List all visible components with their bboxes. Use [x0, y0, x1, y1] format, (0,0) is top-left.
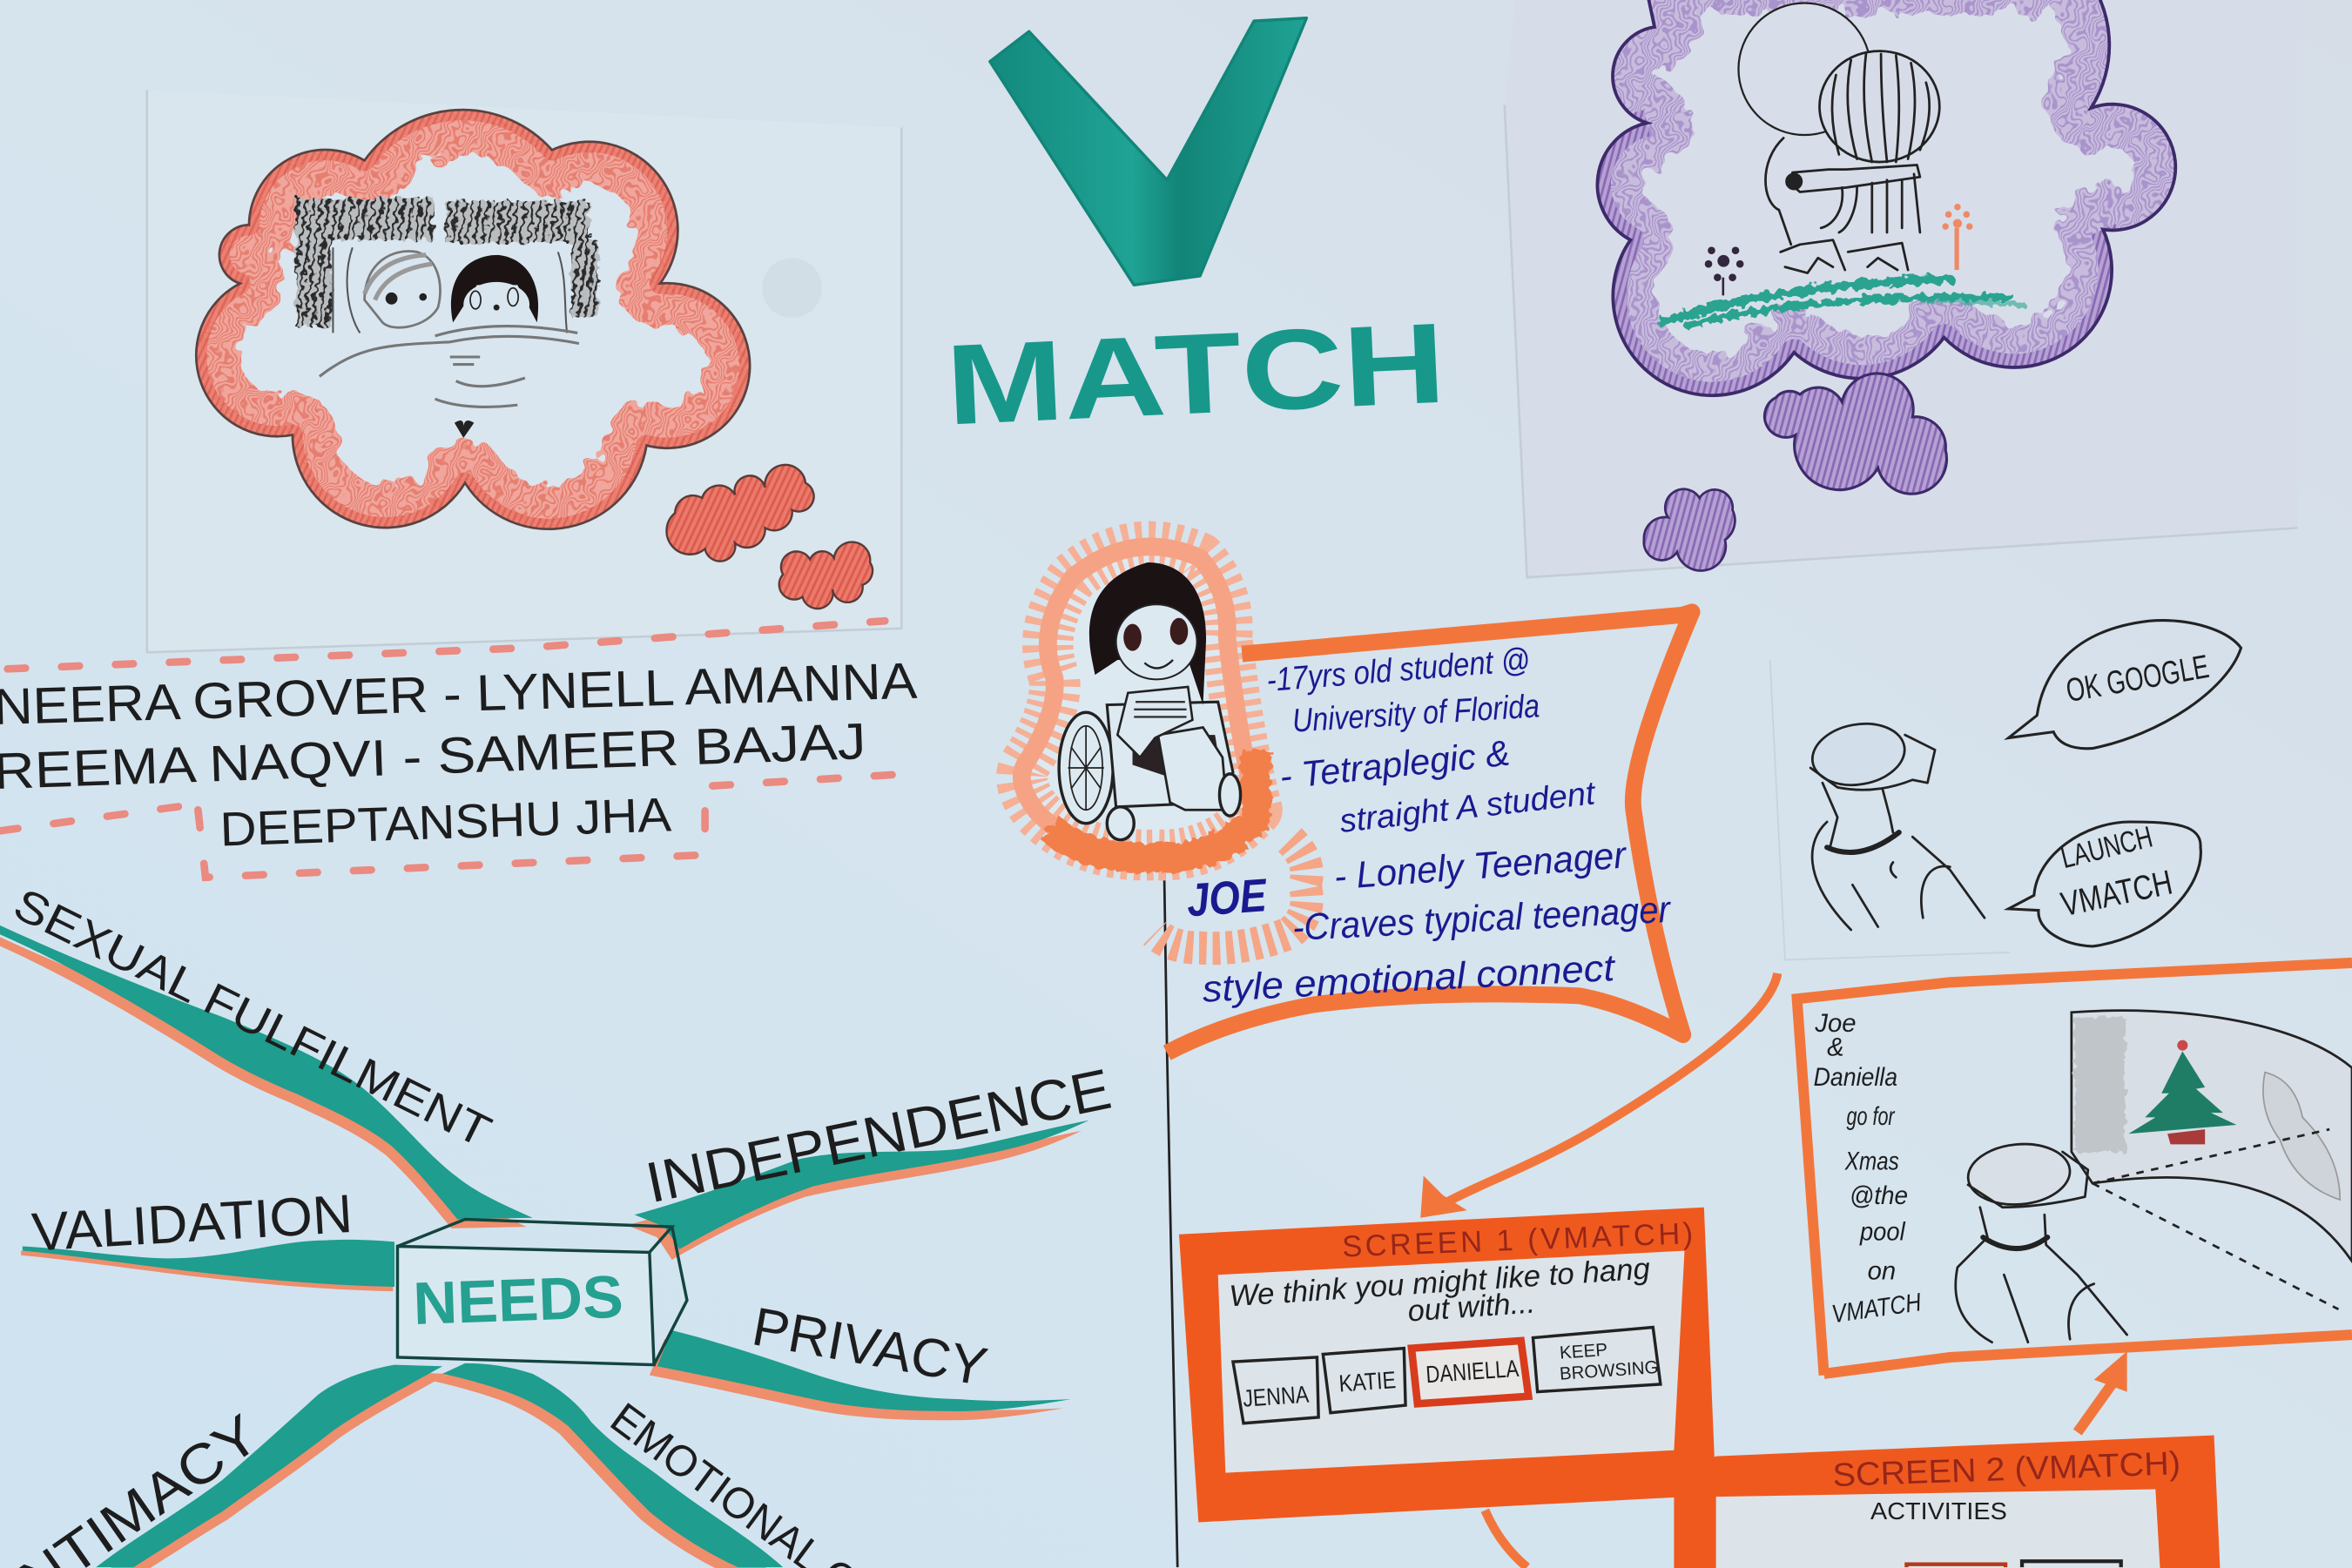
screen 2 title: SCREEN 2 (VMATCH) [1832, 1445, 2181, 1494]
story caption: Joe [1814, 1009, 1857, 1038]
needs box [397, 1219, 687, 1365]
button: Keep browsing: KEEP [1559, 1340, 1608, 1363]
names line 1: NEERA GROVER - LYNELL AMANNA [0, 653, 918, 736]
christmas tree [2128, 1040, 2236, 1144]
persona notes [1202, 642, 1672, 1011]
names line 3: DEEPTANSHU JHA [219, 787, 672, 857]
cloud outline [1597, 0, 2175, 395]
story caption: Xmas [1844, 1147, 1899, 1176]
screen 1 display [1218, 1251, 1684, 1473]
branch: privacy [657, 1330, 1071, 1411]
sheet edges [147, 90, 2298, 652]
names line 2: REEMA NAQVI - SAMEER BAJAJ [0, 713, 866, 800]
team names [0, 653, 918, 857]
small thought bubble 1 [666, 465, 814, 562]
Joe name: JOE [1185, 870, 1269, 926]
label: validation: VALIDATION [30, 1184, 354, 1263]
VR dome scene [2072, 1011, 2352, 1262]
button: Katie: KATIE [1338, 1366, 1397, 1397]
vmatch text: VMATCH [2058, 863, 2176, 924]
Joe in wheelchair [1059, 562, 1241, 840]
arrow: screen 1 to screen 2 [1485, 1511, 1527, 1567]
branch: independence [635, 1120, 1089, 1249]
persona notes: - Lonely Teenager [1332, 834, 1628, 898]
dashed name frame [0, 621, 907, 878]
branch: validation [23, 1240, 394, 1287]
story scene [1797, 963, 2352, 1376]
arrow: screen 2 to story [2078, 1351, 2127, 1432]
orange flower [1942, 204, 1973, 270]
button: Daniella selected: DANIELLA [1425, 1355, 1520, 1388]
mind map: needs [0, 878, 1116, 1568]
story caption: Daniella [1814, 1063, 1897, 1092]
screen 1 [1179, 1208, 1716, 1522]
story caption: go for [1846, 1102, 1896, 1131]
screen 2 frame [1674, 1436, 2220, 1568]
cloud fill [196, 110, 750, 529]
persona notes: - Tetraplegic & [1277, 733, 1512, 797]
button: Jenna: JENNA [1242, 1381, 1311, 1412]
button: Katie [1323, 1349, 1405, 1413]
blanket lines [320, 326, 579, 407]
dark hatched wall [295, 198, 598, 327]
branch: emotional connect [442, 1363, 783, 1567]
screen 2 display [1716, 1490, 2160, 1568]
speech bubble: ok google [2009, 621, 2241, 749]
screen 2 heading: ACTIVITIES [1870, 1497, 2007, 1524]
orange aura [1021, 547, 1307, 948]
paper sheet: right illustration [1505, 0, 2298, 577]
speech bubble: launch vmatch [2009, 822, 2200, 946]
button: Jenna [1233, 1357, 1318, 1423]
small thought bubble 2 [1644, 489, 1735, 570]
persona notes: straight A student [1338, 775, 1598, 840]
arrow: persona to screen 1 [1420, 973, 1777, 1218]
story frame [1797, 963, 2352, 1376]
aura interior [1021, 547, 1257, 855]
story caption: on [1868, 1256, 1896, 1285]
story caption: @the [1850, 1181, 1908, 1210]
persona notes: University of Florida [1291, 688, 1540, 740]
story caption: pool [1859, 1218, 1906, 1247]
story caption [1814, 1009, 1924, 1329]
cloud fill [1597, 0, 2175, 395]
label: sexual fulfilment: SEXUAL FULFILMENT [6, 878, 499, 1157]
panel: purple thought cloud, hug [1597, 0, 2175, 570]
button: Daniella selected [1412, 1341, 1528, 1403]
panel: red thought cloud, couple in bed [196, 110, 873, 609]
sheet edge [1770, 660, 2010, 959]
man with VR headset [1808, 717, 1985, 930]
label: independence: INDEPENDENCE [641, 1057, 1116, 1215]
branch: sexual fulfilment [0, 925, 533, 1219]
viewing cone lines [2093, 1129, 2338, 1309]
logo wordmark: MATCH [943, 299, 1448, 448]
persona notes: -Craves typical teenager [1291, 889, 1672, 949]
grass [1662, 279, 2025, 326]
persona notes: -17yrs old student @ [1265, 642, 1531, 699]
story caption: VMATCH [1830, 1288, 1924, 1329]
needs label: NEEDS [412, 1263, 624, 1337]
smudge on paper [762, 258, 822, 318]
dark flower [1705, 246, 1743, 295]
paper sheet: left illustration [147, 90, 901, 652]
screen 1 prompt line 2: out with... [1406, 1286, 1536, 1329]
screen 2 [1674, 1436, 2220, 1568]
cloud outline [196, 110, 750, 529]
persona notes: style emotional connect [1202, 947, 1617, 1011]
activity buttons [1906, 1561, 2121, 1567]
man with VR headset [1956, 1140, 2127, 1343]
persona frame [1167, 612, 1692, 1053]
small thought bubble 1 [1764, 373, 1947, 494]
heart [455, 421, 474, 438]
ok google text: OK GOOGLE [2064, 649, 2212, 710]
screen 1 frame [1179, 1208, 1716, 1522]
branch: intimacy [96, 1365, 442, 1567]
screen 1 title: SCREEN 1 (VMATCH) [1342, 1217, 1694, 1264]
hugging couple [1738, 3, 1939, 273]
label: privacy: PRIVACY [748, 1296, 992, 1397]
persona: Joe [1021, 547, 1692, 1053]
logo: V Match [943, 18, 1448, 448]
button: Keep browsing: BROWSING [1559, 1357, 1659, 1384]
branch shadows [0, 934, 1082, 1568]
small thought bubble 2 [779, 542, 873, 609]
voice command sketch [1770, 621, 2241, 959]
button: Keep browsing [1533, 1328, 1661, 1392]
logo V mark [990, 18, 1306, 285]
launch text: LAUNCH [2058, 820, 2156, 875]
couple faces [333, 247, 567, 333]
story caption: & [1827, 1033, 1844, 1062]
divider line [1164, 858, 1177, 1567]
screen 1 prompt: We think you might like to hang [1229, 1252, 1651, 1313]
